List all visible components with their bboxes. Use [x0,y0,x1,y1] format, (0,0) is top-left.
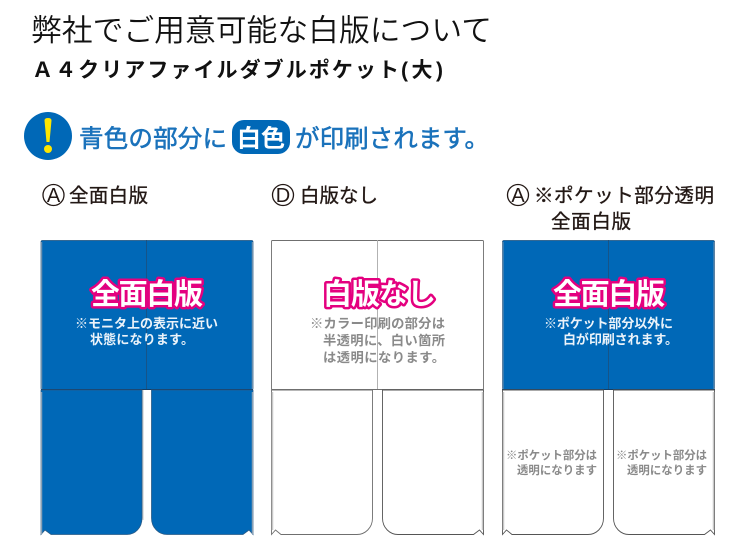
title: 弊社でご用意可能な白版について [31,14,492,48]
right pocket [382,390,484,534]
panel: no white plate: は透明になります。 [323,350,445,365]
notice text: left: 青色の部分に [79,125,227,153]
column 2 heading: 白版なし [300,185,378,207]
subtitle: (大) [401,59,443,82]
file upper sheet [502,240,714,390]
panel: pockets transparent, full white plate: 透明になります [627,463,707,477]
column 3 heading: A [511,185,525,207]
subtitle: Ａ４クリアファイルダブルポケット [32,58,399,82]
panel label: 全面白版 [91,278,203,311]
white-colour pill: 白色 [237,126,285,152]
panel: no white plate: 半透明に、白い箇所 [323,332,445,348]
white-colour pill [232,120,290,154]
panel note: ※ポケット部分以外に [544,316,673,331]
column 2 heading: D [276,185,290,207]
panel label: 全面白版 [553,278,665,311]
left pocket [272,390,372,534]
panel: pockets transparent, full white plate [502,240,715,534]
file upper sheet [272,240,484,390]
icon: exclamation mark [24,112,72,160]
column 3 heading [508,184,714,233]
left pocket [41,390,142,534]
column 3 heading: 全面白版 [551,211,631,233]
column 1 heading: A [47,185,61,207]
panel: full white plate [41,240,253,534]
panel label: 白版なし [323,278,436,311]
panel: full white plate: 状態になります。 [90,332,194,347]
right pocket [152,390,253,534]
panel note: ※カラー印刷の部分は [310,315,445,331]
panel: pockets transparent, full white plate: 白が印刷されます。 [563,332,678,347]
right pocket note: ※ポケット部分は [616,448,708,462]
left pocket [502,390,604,534]
panel: no white plate [272,240,484,534]
notice text: right: が印刷されます。 [295,125,489,153]
notice banner [24,112,489,160]
file upper sheet [41,240,253,390]
column 1 heading: 全面白版 [69,185,148,207]
right pocket [614,390,714,534]
left pocket note: ※ポケット部分は [506,448,598,462]
column 3 heading: ※ポケット部分透明 [534,185,714,207]
panel: pockets transparent, full white plate: 透明になります [517,463,597,477]
panel note: ※モニタ上の表示に近い [75,316,218,331]
